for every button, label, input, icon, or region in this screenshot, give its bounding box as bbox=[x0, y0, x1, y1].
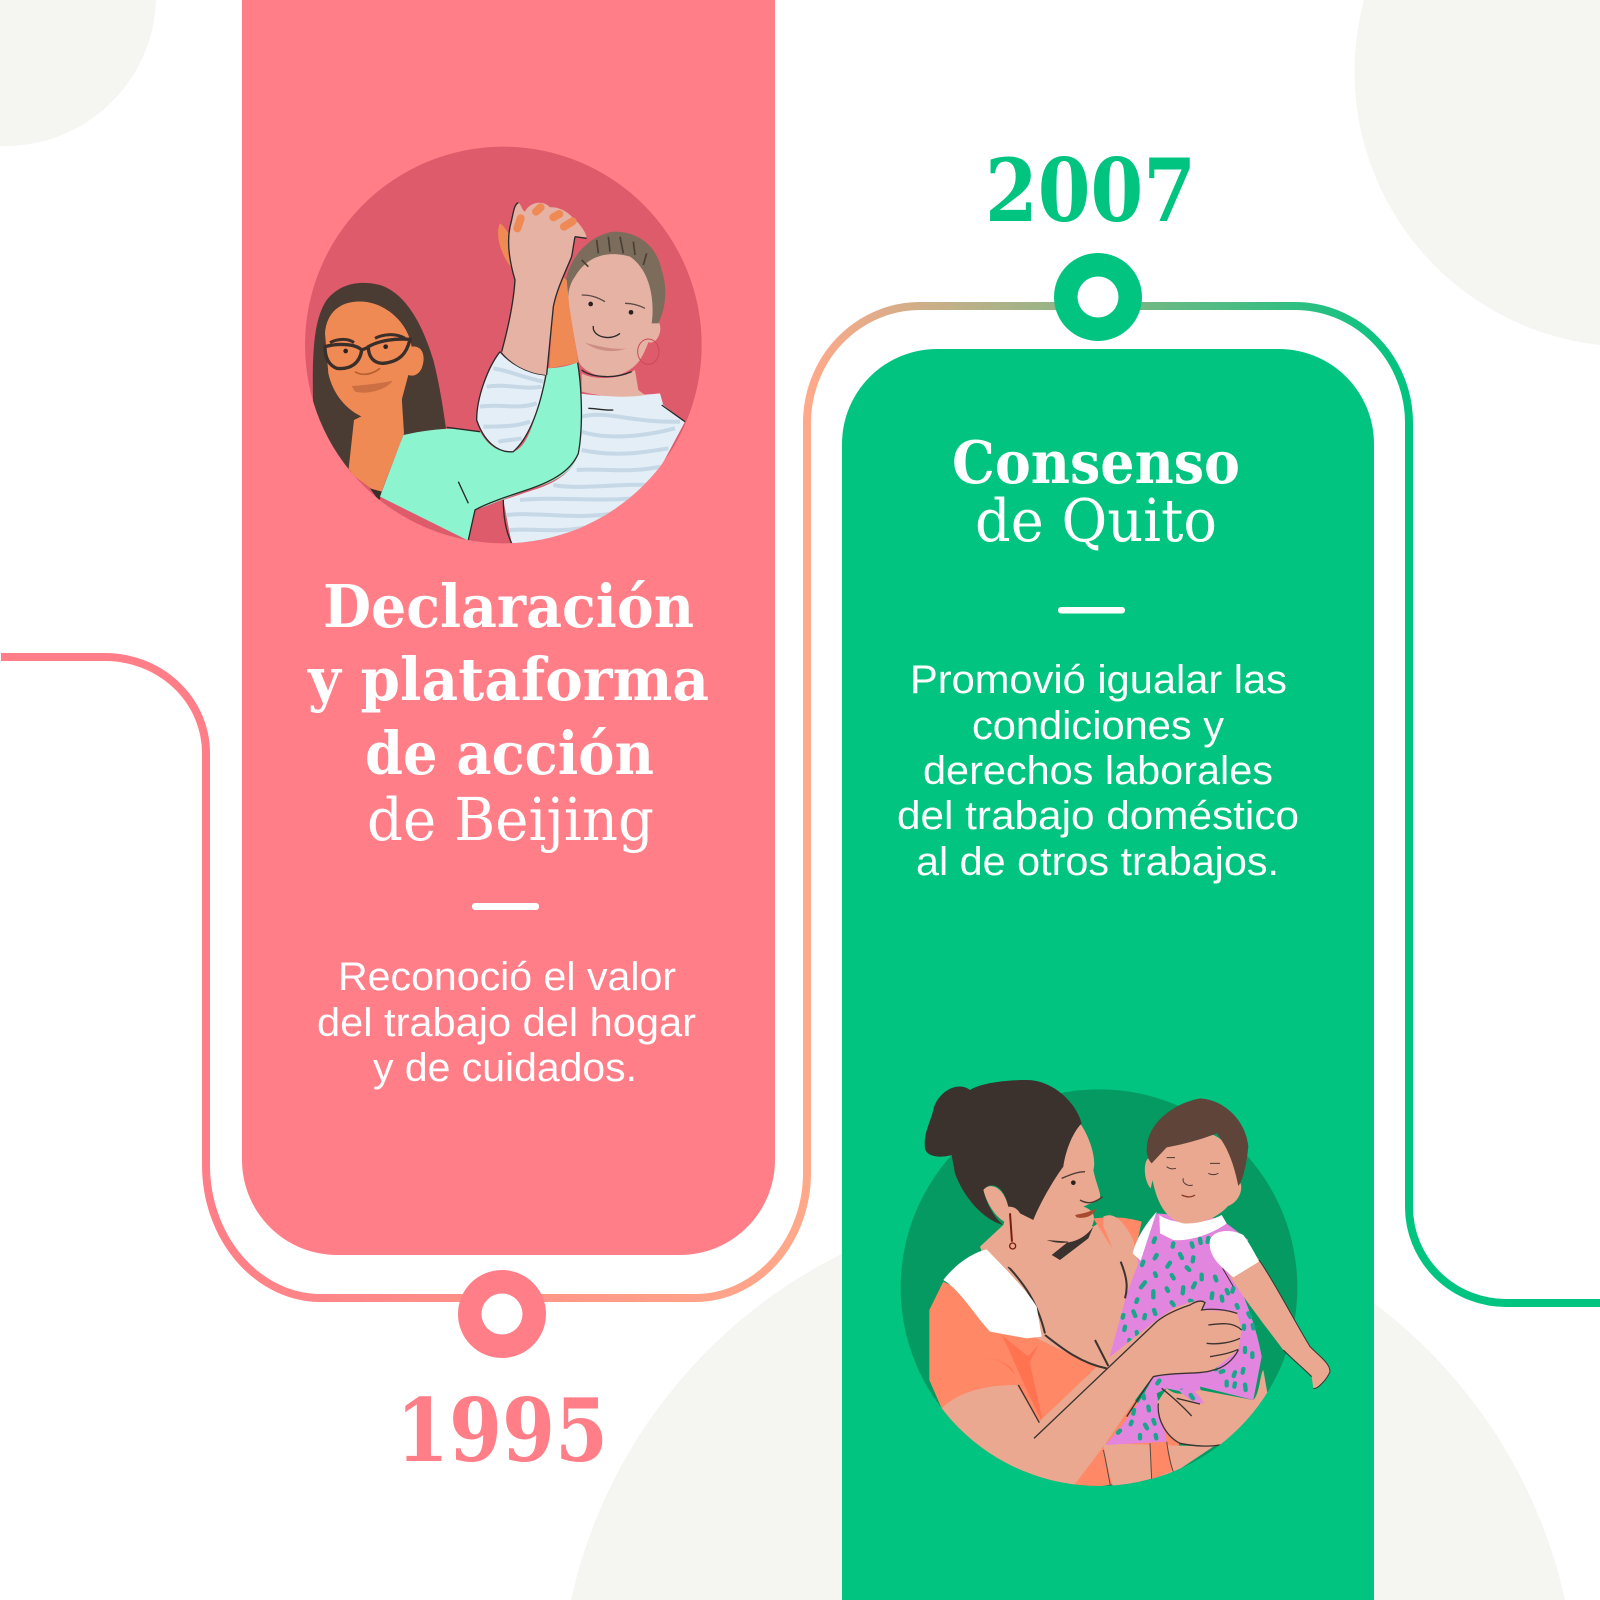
panel: Beijing 1995 bbox=[242, 0, 775, 1255]
body text: Beijing: Reconoció el valor bbox=[338, 955, 676, 999]
body text: Quito: al de otros trabajos. bbox=[916, 840, 1279, 884]
timeline connector line bbox=[1, 306, 1600, 1303]
body text: Quito: Promovió igualar las bbox=[910, 658, 1287, 702]
body text: Beijing: y de cuidados. bbox=[373, 1046, 637, 1090]
heading: Declaración y plataforma de acción de Beijing bbox=[307, 572, 709, 854]
heading: Declaración y plataforma de acción de Beijing: de acción bbox=[365, 719, 654, 788]
body text: Beijing bbox=[317, 955, 696, 1090]
heading: Consenso de Quito bbox=[952, 428, 1240, 555]
body text: Beijing: del trabajo del hogar bbox=[317, 1001, 696, 1045]
body text: Quito: del trabajo doméstico bbox=[897, 794, 1299, 838]
year: 1995: 1995 bbox=[396, 1379, 608, 1482]
illustration: two women holding hands bbox=[305, 147, 702, 547]
background circle: top right bbox=[1355, 0, 1600, 345]
year: 2007: 2007 bbox=[985, 139, 1196, 242]
timeline marker: 1995 bbox=[458, 1270, 546, 1358]
body text: Quito: condiciones y bbox=[972, 704, 1224, 748]
body text: Quito bbox=[897, 658, 1299, 884]
panel: Quito 2007 bbox=[842, 349, 1374, 1600]
heading: Consenso de Quito: Consenso bbox=[952, 428, 1240, 497]
background circle: bottom bbox=[571, 1201, 1565, 1600]
heading: Consenso de Quito: de Quito bbox=[975, 486, 1217, 555]
divider bbox=[472, 903, 539, 910]
divider bbox=[1058, 607, 1125, 614]
heading: Declaración y plataforma de acción de Beijing: Declaración bbox=[323, 572, 694, 641]
illustration: mother holding baby bbox=[901, 1080, 1330, 1490]
body text: Quito: derechos laborales bbox=[923, 749, 1273, 793]
timeline marker: 2007 bbox=[1054, 253, 1142, 341]
heading: Declaración y plataforma de acción de Beijing: de Beijing bbox=[367, 785, 654, 854]
heading: Declaración y plataforma de acción de Beijing: y plataforma bbox=[307, 645, 709, 714]
background circle: top left bbox=[0, 0, 156, 146]
